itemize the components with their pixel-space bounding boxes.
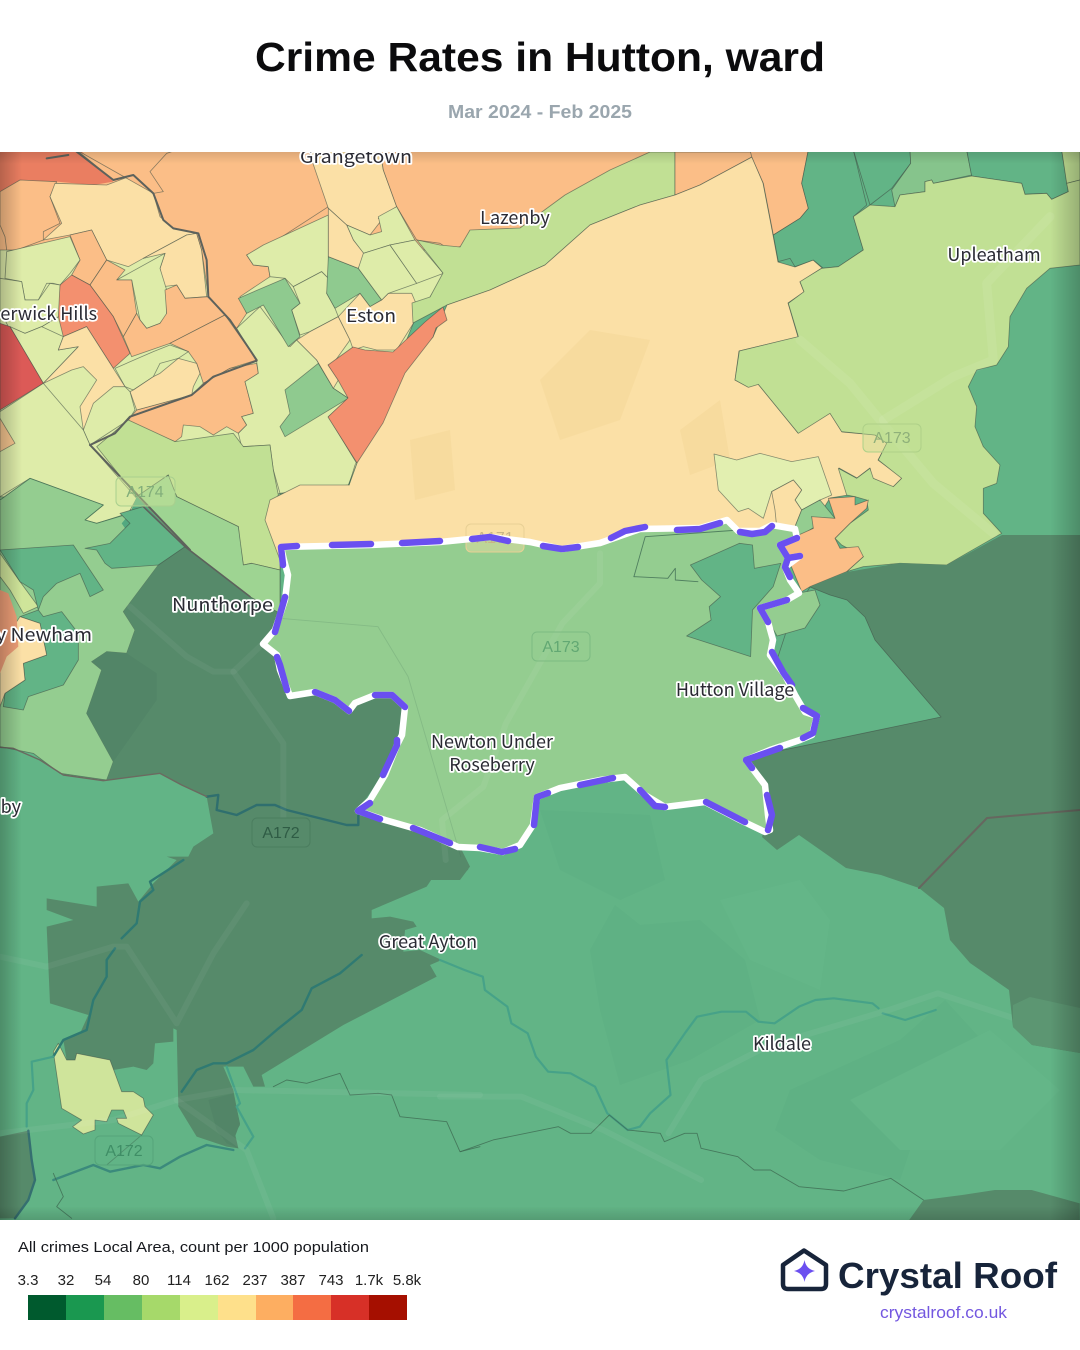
road shields <box>95 424 921 1165</box>
red ward south of Eston <box>328 307 447 463</box>
shield: A172 north <box>252 818 310 847</box>
legend: scale tick labels: 162 <box>204 1272 230 1289</box>
shield: A172 south: A172 <box>105 1143 143 1160</box>
large pale yellow ward north of Hutton <box>265 157 902 560</box>
dark green rural wards west <box>0 547 470 1218</box>
shield: A173 east <box>863 424 921 452</box>
legend: scale tick labels: 80 <box>133 1272 149 1289</box>
shield: A171 <box>466 524 524 552</box>
dark green rural wards east <box>745 535 1080 1220</box>
shield: A173 centre: A173 <box>542 639 580 656</box>
inner low-crime cell <box>280 530 781 860</box>
Lazenby lime strip <box>412 152 675 323</box>
date range subtitle: Mar 2024 - Feb 2025 <box>448 102 632 122</box>
ward boundary: purple dashes <box>275 523 817 852</box>
rivers and southern boundary <box>0 607 1019 1218</box>
shield: A174 <box>116 477 175 506</box>
shield: A173 centre <box>532 632 590 661</box>
legend title: All crimes Local Area, count per 1000 population <box>18 1239 369 1256</box>
legend: scale tick labels: 1.7k <box>355 1272 384 1289</box>
shield: A173 east: A173 <box>873 430 911 447</box>
logo wordmark: Crystal Roof <box>838 1255 1058 1296</box>
legend: scale tick labels: 54 <box>95 1272 111 1289</box>
legend: scale tick labels: 114 <box>167 1272 191 1289</box>
legend: scale tick labels <box>18 1272 422 1289</box>
top orange corner <box>675 152 755 195</box>
place labels: Grangetown <box>300 143 412 169</box>
western ward cells <box>0 507 250 710</box>
shield: A174: A174 <box>126 484 164 501</box>
place labels: Hutton Village <box>676 676 794 702</box>
shield: A172 north: A172 <box>262 825 300 842</box>
place labels: Great Ayton <box>379 928 477 954</box>
shield: A171: A171 <box>476 530 514 547</box>
north-west urban wards <box>0 150 653 613</box>
western base ward <box>0 483 280 780</box>
legend: scale tick labels: 387 <box>280 1272 306 1289</box>
place labels: by <box>1 793 22 819</box>
place labels: Eston <box>346 302 396 328</box>
place labels: Roseberry <box>449 751 535 777</box>
ward boundary: white line <box>263 520 817 852</box>
edge vignette <box>0 152 1080 1220</box>
place labels: Kildale <box>753 1030 811 1056</box>
ward fill: Hutton <box>263 520 817 852</box>
shield: A172 south <box>95 1136 153 1165</box>
place labels: Upleatham <box>947 241 1041 267</box>
legend: scale tick labels: 743 <box>318 1272 344 1289</box>
icon: house with star <box>783 1250 826 1289</box>
legend: scale tick labels: 3.3 <box>18 1272 38 1289</box>
website: crystalroof.co.uk <box>880 1304 1008 1322</box>
logo: Crystal Roof <box>783 1250 1058 1322</box>
place labels: erwick Hills <box>0 300 97 326</box>
southern moor texture <box>540 810 1060 1180</box>
legend: colour scale <box>28 1295 407 1320</box>
place labels: Newton Under <box>431 728 554 754</box>
place labels <box>0 143 1041 1056</box>
legend: scale tick labels: 32 <box>58 1272 74 1289</box>
title: Crime Rates in Hutton, ward <box>255 34 825 80</box>
legend: scale tick labels: 237 <box>242 1272 268 1289</box>
choropleth map <box>0 143 1080 1220</box>
place labels: Nunthorpe <box>172 591 273 617</box>
eastern wards <box>714 150 1080 592</box>
legend: scale tick labels: 5.8k <box>393 1272 422 1289</box>
place labels: Lazenby <box>480 204 550 230</box>
